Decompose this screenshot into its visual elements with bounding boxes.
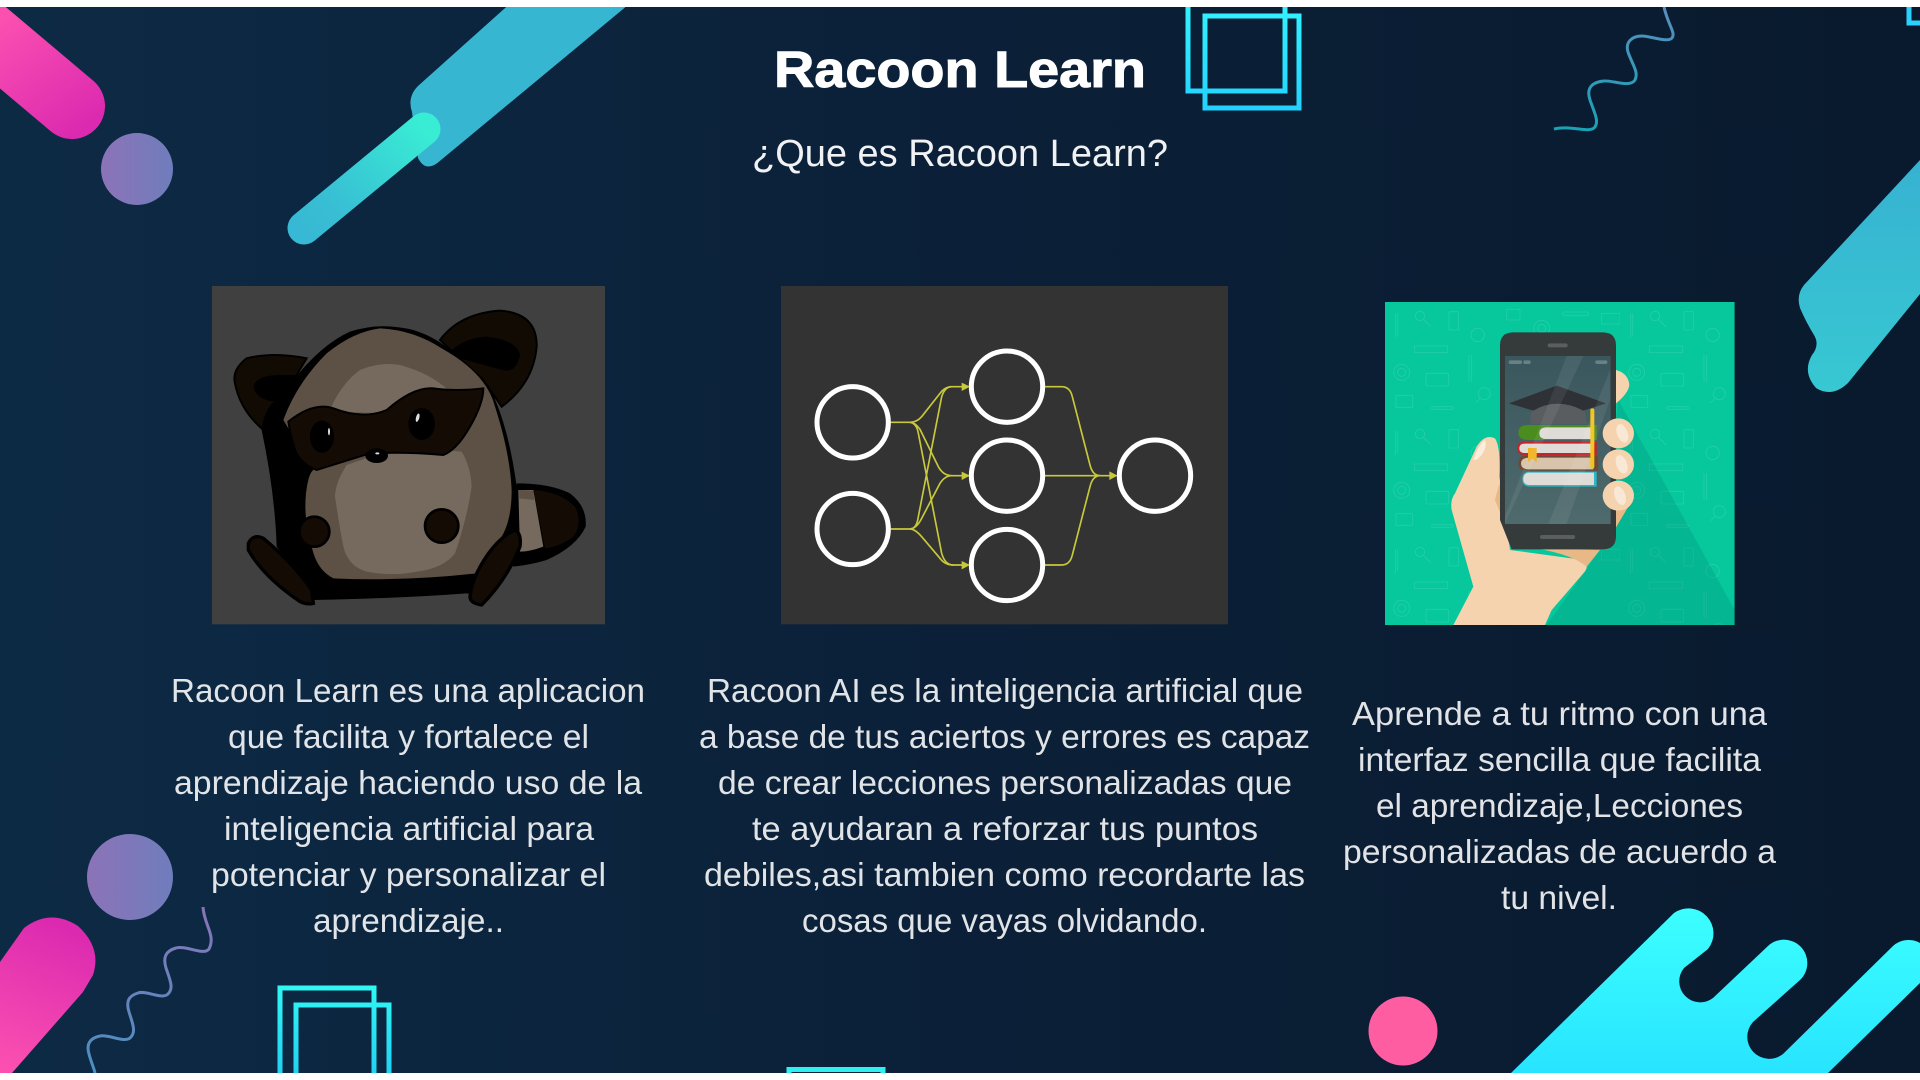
text block: column 2 <box>699 672 1310 939</box>
decoration: squiggle bottom left <box>88 907 211 1073</box>
white strip top <box>0 0 1920 7</box>
network connections <box>891 387 1110 565</box>
network nodes <box>817 351 1191 601</box>
decoration: pink capsule top left <box>0 20 72 106</box>
decoration: cyan blob bottom right <box>1511 908 1920 1073</box>
text block: column 1: potenciar y personalizar el <box>211 856 606 893</box>
text block: column 2: debiles,asi tambien como recordarte las <box>704 856 1305 893</box>
raccoon tail <box>510 483 586 567</box>
text block: column 3: Aprende a tu ritmo con una <box>1352 695 1768 732</box>
raccoon mask and face <box>288 388 483 470</box>
image: raccoon mascot <box>212 286 605 624</box>
fingers <box>1603 418 1634 511</box>
text block: column 3: personalizadas de acuerdo a <box>1343 833 1777 870</box>
raccoon hands <box>299 509 458 547</box>
text block: column 2: de crear lecciones personalizadas que <box>718 764 1292 801</box>
decoration: pink circle bottom right <box>1368 996 1438 1066</box>
decoration: square corner top right <box>1909 0 1920 23</box>
decoration: purple circle top left <box>101 133 173 205</box>
graduation cap <box>1509 386 1606 424</box>
text block: column 1: Racoon Learn es una aplicacion <box>171 672 645 709</box>
decoration: blue and teal bars <box>304 0 634 228</box>
decoration: purple circle bottom left <box>87 834 173 920</box>
text block: column 1: inteligencia artificial para <box>224 810 595 847</box>
raccoon body <box>262 326 517 600</box>
stack of books <box>1517 408 1598 487</box>
hand <box>1451 370 1629 625</box>
text block: column 3: tu nivel. <box>1501 879 1617 916</box>
text block: column 1: aprendizaje.. <box>313 902 504 939</box>
subtitle: ¿Que es Racoon Learn? <box>752 133 1168 175</box>
raccoon feet <box>248 530 520 605</box>
image: neural network diagram <box>781 286 1228 624</box>
decoration: pink capsule bottom left <box>0 917 95 1073</box>
decoration: blue blob right <box>1799 160 1920 392</box>
raccoon left ear <box>234 355 307 430</box>
text block: column 2: te ayudaran a reforzar tus puntos <box>752 810 1258 847</box>
white strip bottom <box>0 1073 1920 1080</box>
raccoon right ear <box>440 311 537 407</box>
decoration: squares top <box>1188 0 1299 108</box>
text block: column 2: Racoon AI es la inteligencia artificial que <box>707 672 1303 709</box>
screen glare <box>1505 356 1610 524</box>
text block: column 3: el aprendizaje,Lecciones <box>1376 787 1743 824</box>
arrowheads <box>962 383 1118 569</box>
image: hand holding phone with books <box>1385 302 1735 625</box>
decoration: squares bottom <box>280 988 389 1080</box>
text block: column 1: que facilita y fortalece el <box>228 718 589 755</box>
text block: column 1 <box>171 672 645 939</box>
long shadow <box>1547 400 1735 625</box>
text block: column 3: interfaz sencilla que facilita <box>1358 741 1762 778</box>
decoration: square bottom center <box>789 1070 883 1080</box>
text block: column 2: a base de tus aciertos y errores es capaz <box>699 718 1310 755</box>
text block: column 2: cosas que vayas olvidando. <box>802 902 1207 939</box>
text block: column 3 <box>1343 695 1777 916</box>
text block: column 1: aprendizaje haciendo uso de la <box>174 764 643 801</box>
decoration: squiggle top right <box>1554 7 1673 130</box>
phone <box>1500 332 1616 549</box>
title: Racoon Learn <box>774 41 1146 98</box>
